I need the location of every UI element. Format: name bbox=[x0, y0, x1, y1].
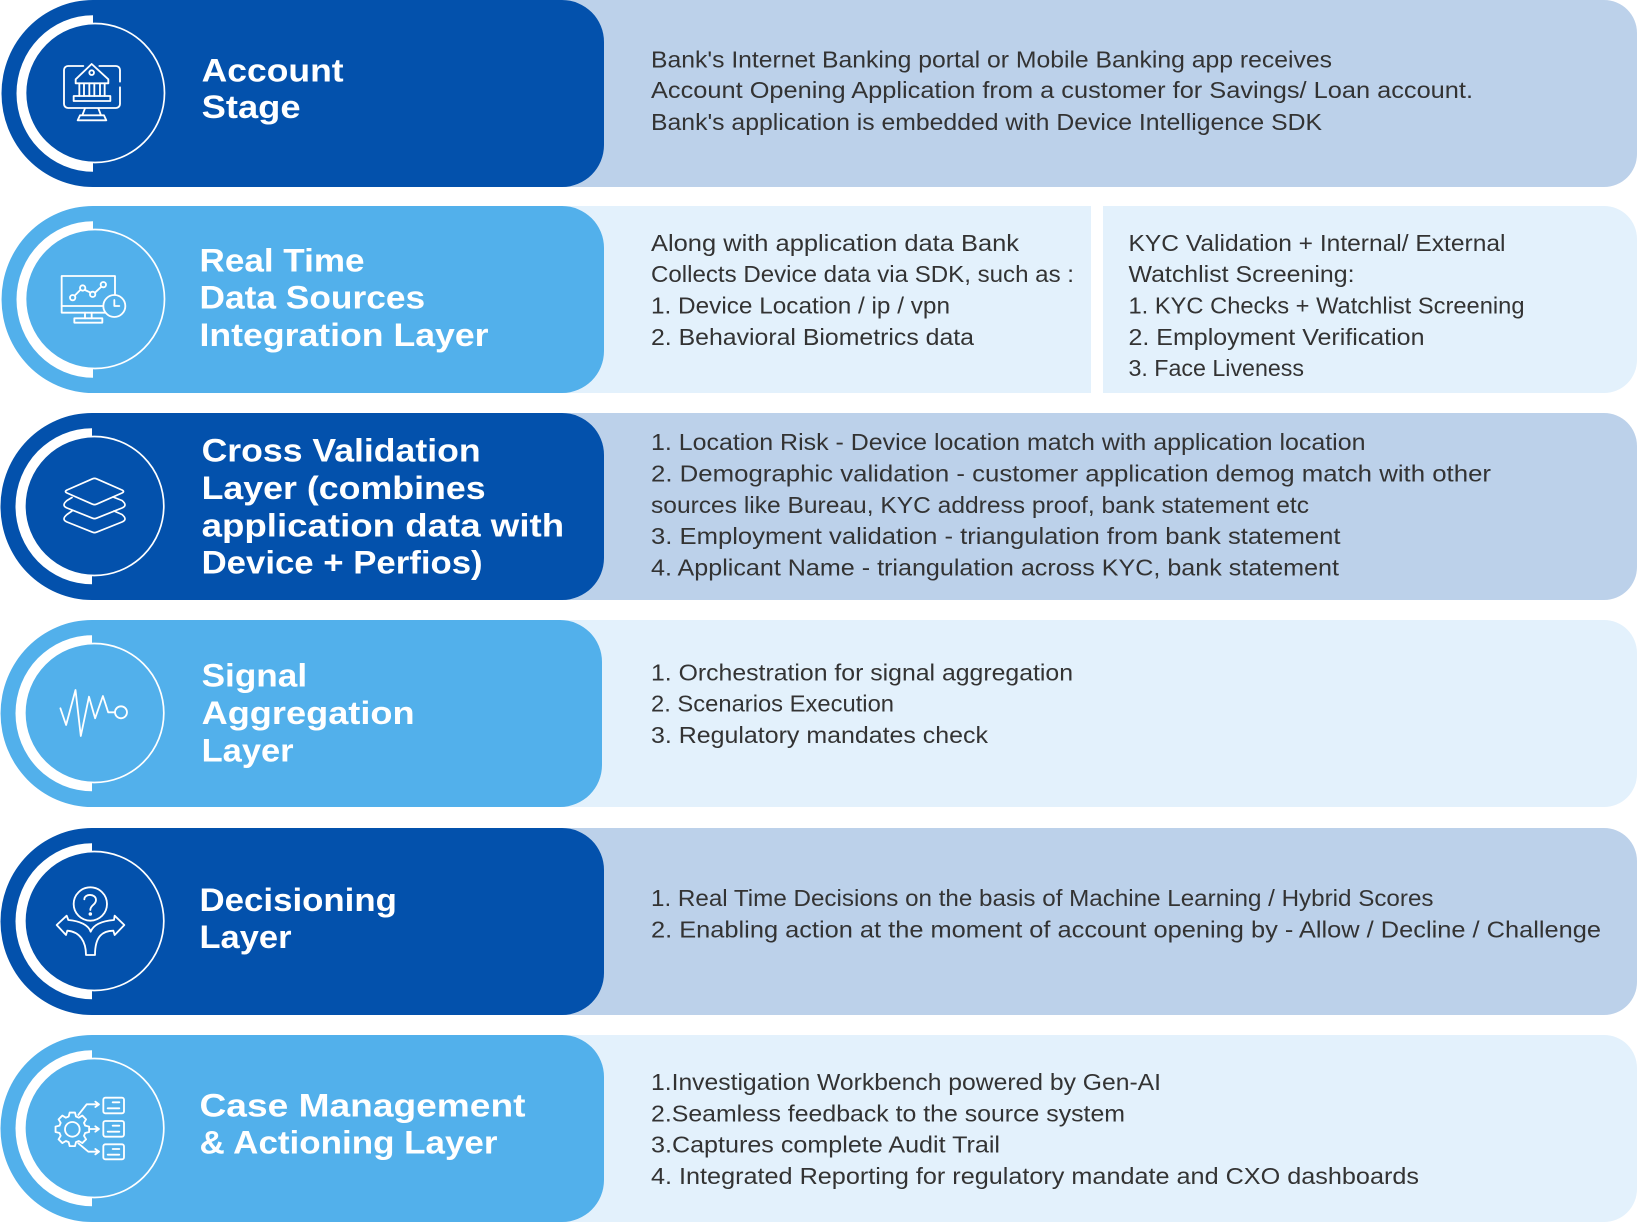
description text: 4. Applicant Name - triangulation across KYC, bank statement bbox=[651, 554, 1340, 580]
heading: Aggregation bbox=[202, 695, 415, 731]
header pill bbox=[0, 828, 604, 1015]
header pill bbox=[2, 206, 604, 393]
panel: decisioning layer bbox=[0, 828, 1637, 1015]
panel: case management and actioning layer bbox=[0, 1035, 1637, 1222]
description text: KYC validation bbox=[1128, 230, 1524, 381]
heading: Real Time bbox=[200, 242, 364, 278]
description text bbox=[651, 429, 1491, 580]
description text: device data bbox=[651, 230, 1074, 350]
heading bbox=[202, 52, 344, 125]
description text: device data: Collects Device data via SDK, such as : bbox=[651, 261, 1074, 287]
heading: Account bbox=[202, 52, 344, 88]
description text: 2. Scenarios Execution bbox=[651, 690, 894, 716]
icon circle bbox=[25, 852, 164, 990]
description text: 1. Real Time Decisions on the basis of Machine Learning / Hybrid Scores bbox=[651, 885, 1434, 911]
description panel background bbox=[560, 1035, 1637, 1222]
heading bbox=[200, 242, 488, 353]
description text bbox=[651, 885, 1601, 942]
icon circle bbox=[26, 24, 164, 162]
description text: 2. Enabling action at the moment of account opening by - Allow / Decline / Challenge bbox=[651, 916, 1601, 942]
description text: Account Opening Application from a customer for Savings/ Loan account. bbox=[651, 77, 1473, 103]
description text: 3. Regulatory mandates check bbox=[651, 722, 988, 748]
description panel background bbox=[560, 828, 1637, 1015]
description text: sources like Bureau, KYC address proof, bank statement etc bbox=[651, 492, 1309, 518]
header pill bbox=[0, 1035, 604, 1222]
icon circle bbox=[25, 436, 164, 576]
white crescent ring bbox=[16, 428, 92, 584]
description text: Bank's application is embedded with Device Intelligence SDK bbox=[651, 109, 1322, 135]
heading: Layer bbox=[202, 733, 294, 769]
description panel background bbox=[560, 0, 1637, 187]
description text: device data: 1. Device Location / ip / vpn bbox=[651, 292, 950, 318]
white crescent ring bbox=[17, 15, 93, 172]
heading: application data with bbox=[202, 508, 564, 544]
description panel right bbox=[1103, 206, 1637, 393]
panel: real time data sources integration layer bbox=[2, 206, 1637, 393]
white crescent ring bbox=[16, 1050, 92, 1206]
heading bbox=[200, 1088, 526, 1160]
white crescent ring bbox=[16, 635, 92, 791]
heading: Stage bbox=[202, 89, 301, 125]
panel: account stage bbox=[1, 0, 1637, 187]
header pill bbox=[1, 620, 602, 807]
heading: Cross Validation bbox=[202, 433, 481, 469]
icon: gear with output documents bbox=[56, 1098, 124, 1159]
icon: bank on monitor bbox=[64, 64, 120, 120]
description text: 2.Seamless feedback to the source system bbox=[651, 1100, 1125, 1126]
panel: cross validation layer bbox=[0, 413, 1637, 600]
heading: Layer bbox=[200, 919, 292, 955]
description text: Bank's Internet Banking portal or Mobile Banking app receives bbox=[651, 46, 1332, 72]
icon circle bbox=[26, 230, 164, 368]
heading: & Actioning Layer bbox=[200, 1124, 498, 1160]
icon circle bbox=[25, 644, 164, 782]
description text: 2. Demographic validation - customer application demog match with other bbox=[651, 460, 1491, 486]
heading: Data Sources bbox=[200, 280, 425, 316]
description panel background bbox=[560, 620, 1637, 807]
heading bbox=[200, 882, 397, 955]
icon: question with diverging arrows bbox=[57, 887, 124, 955]
header pill bbox=[0, 413, 604, 600]
description text: 4. Integrated Reporting for regulatory mandate and CXO dashboards bbox=[651, 1163, 1419, 1189]
heading: Integration Layer bbox=[200, 317, 488, 353]
description text: device data: 2. Behavioral Biometrics data bbox=[651, 324, 975, 350]
heading bbox=[202, 433, 564, 580]
icon: stacked layers bbox=[64, 478, 125, 533]
heading: Device + Perfios) bbox=[202, 544, 483, 580]
header pill bbox=[1, 0, 604, 187]
heading: Decisioning bbox=[200, 882, 397, 918]
description text bbox=[651, 660, 1073, 748]
description text bbox=[651, 46, 1473, 135]
heading: Signal bbox=[202, 658, 307, 694]
description text: 1.Investigation Workbench powered by Gen-AI bbox=[651, 1069, 1161, 1095]
description text: 3.Captures complete Audit Trail bbox=[651, 1132, 1000, 1158]
description panel left bbox=[560, 206, 1091, 393]
heading: Layer (combines bbox=[202, 470, 486, 506]
panel: signal aggregation layer bbox=[1, 620, 1637, 807]
icon: pulse signal bbox=[60, 690, 127, 736]
description text: device data: Along with application data Bank bbox=[651, 230, 1019, 256]
description text: KYC validation: Watchlist Screening: bbox=[1128, 261, 1354, 287]
description text: 3. Employment validation - triangulation from bank statement bbox=[651, 523, 1341, 549]
icon: monitor with chart and clock bbox=[62, 276, 125, 323]
description text: 1. Orchestration for signal aggregation bbox=[651, 660, 1073, 686]
heading: Case Management bbox=[200, 1088, 526, 1124]
description panel background bbox=[560, 413, 1637, 600]
description text bbox=[651, 1069, 1419, 1189]
description text: KYC validation: 1. KYC Checks + Watchlist Screening bbox=[1128, 292, 1524, 318]
white crescent ring bbox=[16, 843, 92, 999]
description text: KYC validation: 3. Face Liveness bbox=[1128, 355, 1304, 381]
icon circle bbox=[25, 1058, 164, 1198]
heading bbox=[202, 658, 415, 769]
description text: KYC validation: 2. Employment Verification bbox=[1128, 324, 1424, 350]
description text: 1. Location Risk - Device location match with application location bbox=[651, 429, 1366, 455]
white crescent ring bbox=[17, 221, 93, 378]
description text: KYC validation: KYC Validation + Internal/ External bbox=[1128, 230, 1506, 256]
